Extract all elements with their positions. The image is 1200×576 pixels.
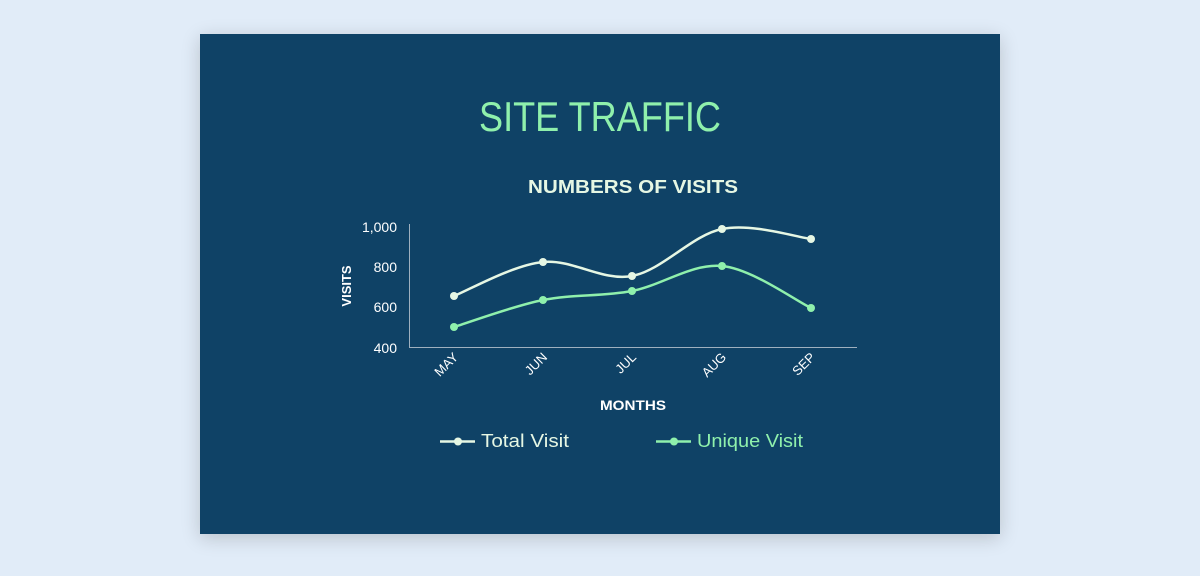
x-axis labels: AUG <box>699 350 729 380</box>
x-axis title: MONTHS <box>600 397 666 413</box>
y-axis labels: 800 <box>374 259 397 275</box>
legend: total visit: Total Visit <box>481 431 569 451</box>
legend: unique visit: Unique Visit <box>697 431 803 451</box>
legend: unique visit <box>656 431 803 451</box>
chart subtitle: NUMBERS OF VISITS <box>528 177 738 197</box>
axes <box>410 224 857 348</box>
panel: site traffic card <box>200 34 1000 534</box>
y-axis title: VISITS <box>339 265 354 307</box>
x-axis labels <box>431 349 818 380</box>
y-axis labels: 600 <box>374 299 397 315</box>
x-axis labels: SEP <box>789 350 818 379</box>
y-axis labels: 1,000 <box>362 219 397 235</box>
x-axis labels: JUN <box>522 350 550 378</box>
x-axis labels: MAY <box>431 349 461 379</box>
y-axis labels <box>362 219 397 356</box>
y-axis labels: 400 <box>374 340 397 356</box>
legend: total visit <box>440 431 569 451</box>
title: SITE TRAFFIC <box>479 93 721 140</box>
x-axis labels: JUL <box>612 350 639 376</box>
line: total visit <box>450 225 815 300</box>
line: unique visit <box>450 262 815 331</box>
